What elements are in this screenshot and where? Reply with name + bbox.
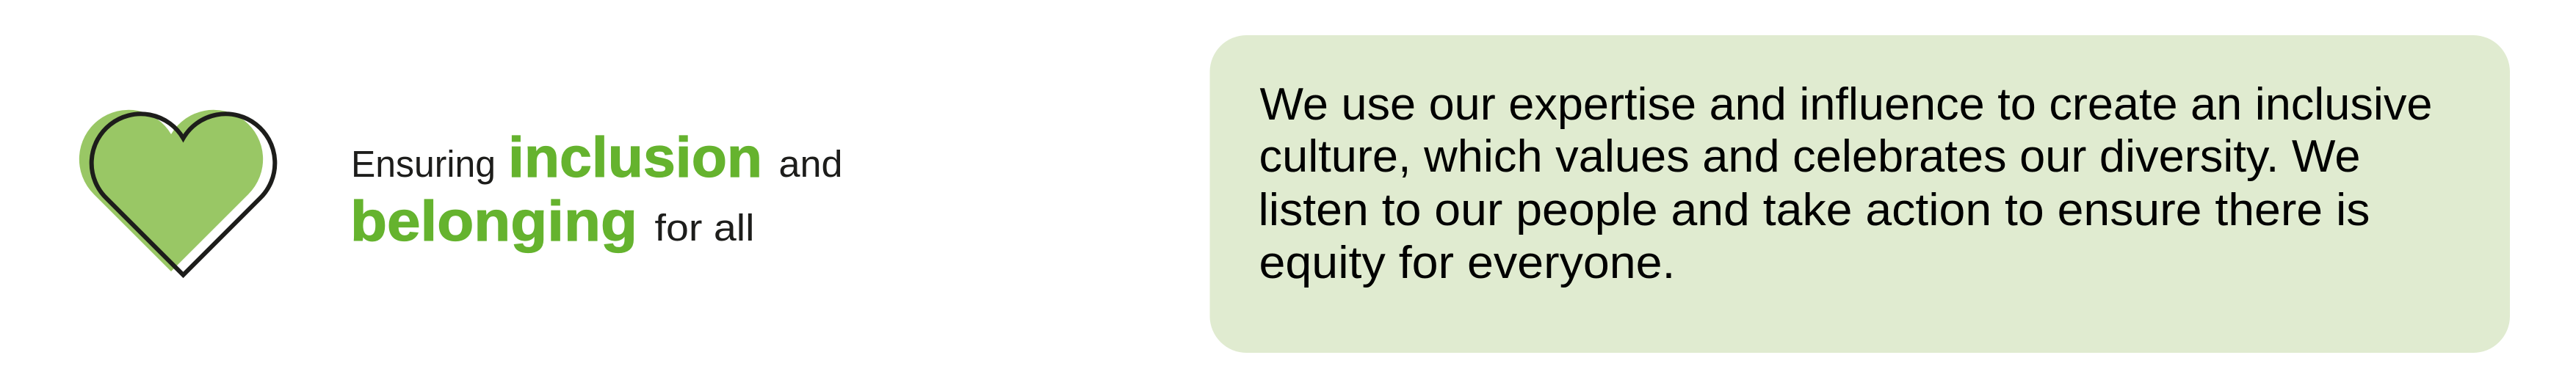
panel: description bbox=[1210, 35, 2510, 353]
heart green fill bbox=[79, 110, 263, 271]
panel body text: We use our expertise and influence to create an inclusive bbox=[1260, 79, 2432, 130]
heading: Ensuring inclusion and belonging for all bbox=[350, 126, 843, 253]
heading word: inclusion: inclusion bbox=[508, 126, 762, 189]
panel body text: culture, which values and celebrates our diversity. We bbox=[1259, 131, 2360, 182]
heading words: for all: for all bbox=[655, 207, 755, 249]
heading word: Ensuring: Ensuring bbox=[351, 143, 496, 185]
panel body text: equity for everyone. bbox=[1259, 238, 1676, 288]
heart black outline bbox=[92, 114, 275, 275]
heading word: belonging: belonging bbox=[350, 190, 637, 253]
icon: heart bbox=[79, 110, 275, 275]
panel background bbox=[1210, 35, 2510, 353]
panel body text bbox=[1259, 79, 2432, 288]
panel body text: listen to our people and take action to ensure there is bbox=[1259, 185, 2370, 235]
heading word: and: and bbox=[778, 143, 843, 185]
